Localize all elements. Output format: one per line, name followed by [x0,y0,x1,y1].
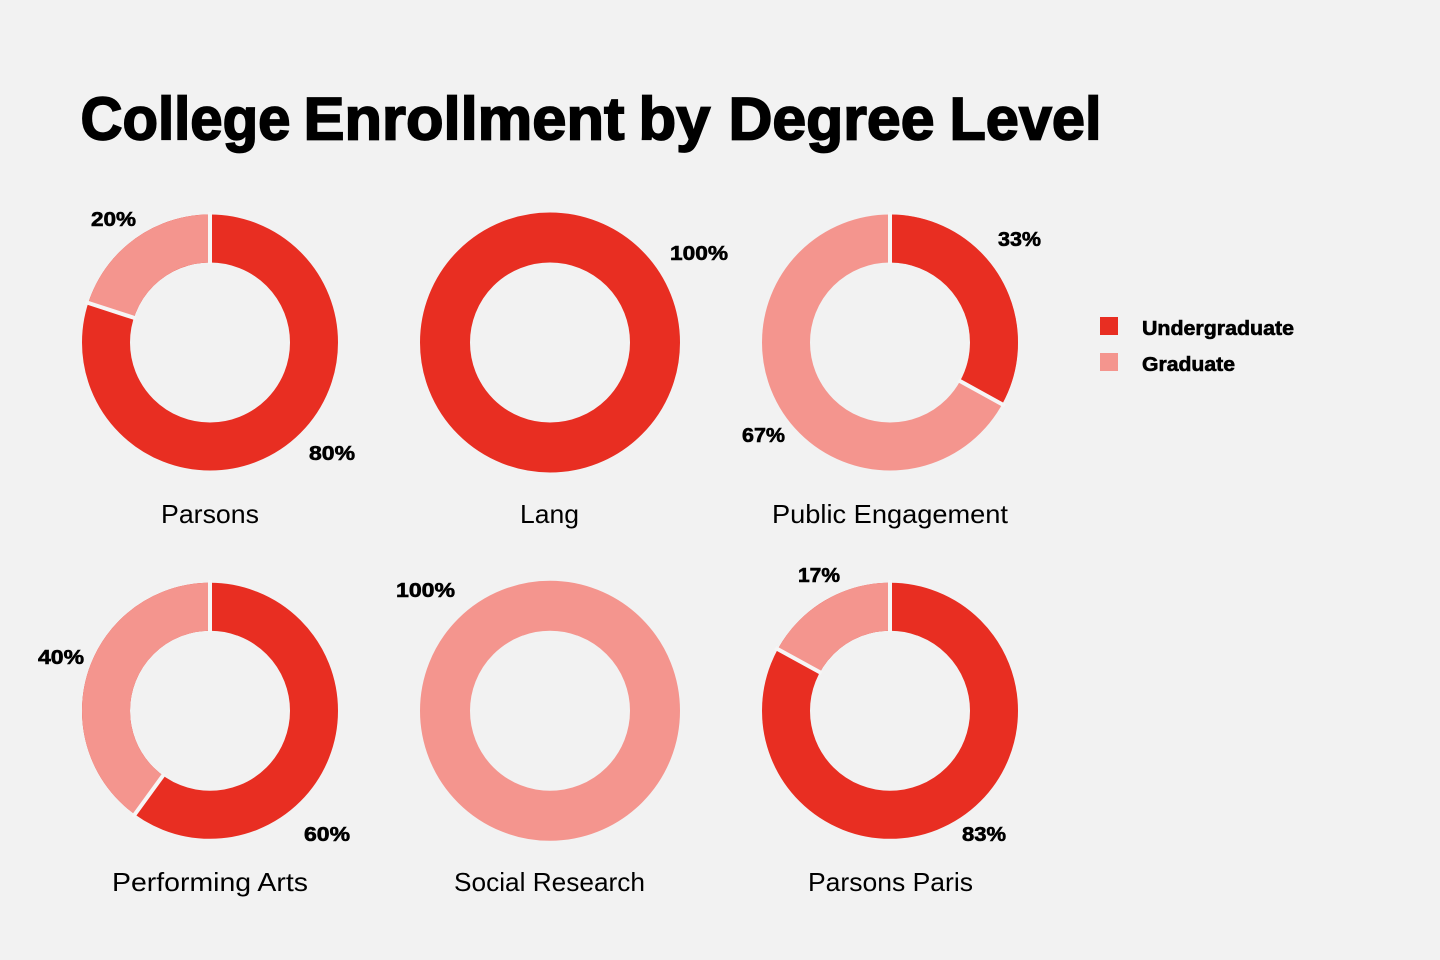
panel: Parsons donut: Parsons [161,499,259,529]
panel: Performing Arts donut: 60% [304,824,350,846]
panel: Parsons Paris donut: Parsons Paris [808,867,973,897]
title: Level [950,86,1102,152]
panel: Lang donut [445,238,728,529]
panel: Parsons donut [85,209,355,529]
panel: Public Engagement donut: Public Engagement [772,499,1009,529]
title: Degree [728,86,934,152]
panel: Parsons donut: 80% [309,443,355,465]
legend: Undergraduate [1142,318,1294,340]
panel: Parsons donut: 20% [91,209,136,231]
panel: Performing Arts donut [38,580,350,897]
title: Enrollment [304,86,625,152]
legend [1100,317,1294,376]
panel: Public Engagement donut: 33% [998,229,1041,251]
title [80,86,1102,152]
legend: Graduate [1142,354,1235,376]
panel: Social Research donut: Social Research [454,867,645,897]
panel: Social Research donut: 100% [396,580,455,602]
panel: Lang donut: Lang [520,499,579,529]
panel: Parsons Paris donut: 17% [798,565,840,587]
panel: Performing Arts donut: 40% [38,647,84,669]
panel: Parsons Paris donut [775,565,1006,897]
panel: Social Research donut [396,580,655,897]
panel: Lang donut: 100% [670,243,728,265]
title: by [638,86,711,152]
panel: Performing Arts donut: Performing Arts [112,867,308,897]
title: College [80,86,290,152]
panel: Parsons Paris donut: 83% [962,824,1006,846]
panel: Public Engagement donut [742,212,1041,529]
panel: Public Engagement donut: 67% [742,425,785,447]
